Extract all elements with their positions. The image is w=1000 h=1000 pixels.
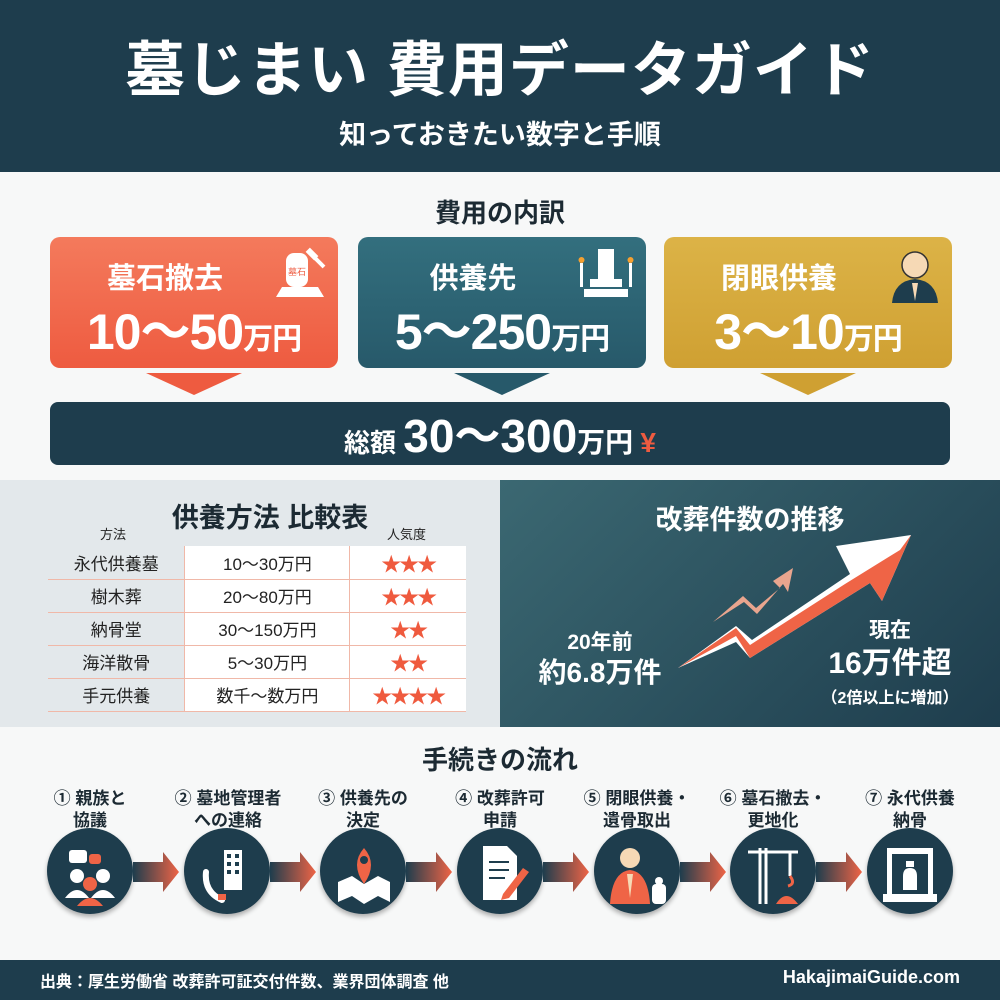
card: memorial destination: 供養先 bbox=[429, 263, 516, 295]
steps: ④ 改葬許可 bbox=[455, 789, 545, 808]
steps: ② 墓地管理者 bbox=[175, 789, 281, 808]
total bar: 総額 30〜300万円 ¥ bbox=[344, 410, 656, 462]
subtitle: 知っておきたい数字と手順 bbox=[339, 120, 661, 150]
total bar bbox=[50, 402, 950, 465]
table: ★★★ bbox=[381, 587, 435, 609]
text: now: 16万件超 bbox=[828, 647, 952, 680]
steps: 申請 bbox=[483, 811, 517, 830]
table: 10〜30万円 bbox=[223, 555, 312, 574]
title: 墓じまい 費用データガイド bbox=[125, 37, 875, 104]
heading: table: 供養方法 比較表 bbox=[172, 503, 368, 533]
table bbox=[48, 546, 466, 712]
table: 納骨堂 bbox=[91, 621, 142, 640]
table: 永代供養墓 bbox=[74, 555, 159, 574]
source text: 出典：厚生労働省 改葬許可証交付件数、業界団体調査 他 bbox=[40, 974, 449, 991]
steps: 更地化 bbox=[748, 811, 798, 830]
heading: trend: 改葬件数の推移 bbox=[656, 505, 844, 535]
chart arrow bbox=[678, 535, 911, 668]
card: closing ceremony: 閉眼供養 bbox=[721, 263, 837, 295]
steps: への連絡 bbox=[194, 811, 262, 830]
card: closing ceremony bbox=[664, 237, 952, 368]
table: 数千〜数万円 bbox=[216, 687, 318, 706]
heading: cost breakdown: 費用の内訳 bbox=[435, 198, 565, 228]
text: 20 years ago bbox=[539, 630, 661, 688]
card: tombstone removal bbox=[50, 237, 338, 368]
steps: ⑥ 墓石撤去・ bbox=[720, 789, 826, 808]
table: ★★ bbox=[390, 653, 426, 675]
text: 20 years ago: 約6.8万件 bbox=[539, 657, 661, 688]
table: 20〜80万円 bbox=[223, 588, 312, 607]
steps: 遺骨取出 bbox=[603, 811, 671, 830]
steps: ③ 供養先の bbox=[318, 789, 408, 808]
icon: tombstone: 墓石 bbox=[288, 265, 306, 278]
icon: grave bbox=[578, 249, 634, 297]
icon: tombstone bbox=[276, 248, 326, 297]
arrows: down triangles bbox=[146, 373, 856, 395]
footer bbox=[0, 960, 1000, 1000]
text: now bbox=[822, 618, 958, 707]
panel: comparison table: 方法 bbox=[100, 527, 126, 542]
card: tombstone removal: 10〜50万円 bbox=[87, 304, 301, 360]
text: 20 years ago: 20年前 bbox=[567, 631, 633, 654]
card: closing ceremony: 3〜10万円 bbox=[714, 304, 902, 360]
card: memorial destination bbox=[358, 237, 646, 368]
header bbox=[0, 0, 1000, 172]
table: 30〜150万円 bbox=[218, 621, 317, 640]
table: 海洋散骨 bbox=[82, 654, 150, 673]
steps: 決定 bbox=[346, 811, 380, 830]
table: 5〜30万円 bbox=[228, 654, 307, 673]
site url: HakajimaiGuide.com bbox=[783, 967, 960, 987]
table: ★★★ bbox=[381, 554, 435, 576]
table: 手元供養 bbox=[82, 687, 150, 706]
steps: ① 親族と bbox=[54, 789, 126, 808]
table: ★★ bbox=[390, 620, 426, 642]
panel: trend bbox=[500, 480, 1000, 727]
steps: 協議 bbox=[73, 811, 107, 830]
text: now: （2倍以上に増加） bbox=[822, 690, 958, 707]
panel: comparison table: 人気度 bbox=[387, 527, 426, 542]
steps bbox=[54, 789, 955, 830]
card: tombstone removal: 墓石撤去 bbox=[107, 263, 223, 295]
table: 樹木葬 bbox=[91, 588, 142, 607]
steps: 納骨 bbox=[893, 811, 927, 830]
panel: comparison table bbox=[0, 480, 500, 727]
heading: procedure flow: 手続きの流れ bbox=[422, 745, 578, 775]
text: now: 現在 bbox=[869, 619, 911, 642]
steps: ⑦ 永代供養 bbox=[865, 789, 955, 808]
steps: ⑤ 閉眼供養・ bbox=[584, 789, 690, 808]
icon: monk bbox=[892, 251, 938, 303]
card: memorial destination: 5〜250万円 bbox=[395, 304, 609, 360]
table: ★★★★ bbox=[372, 686, 444, 708]
